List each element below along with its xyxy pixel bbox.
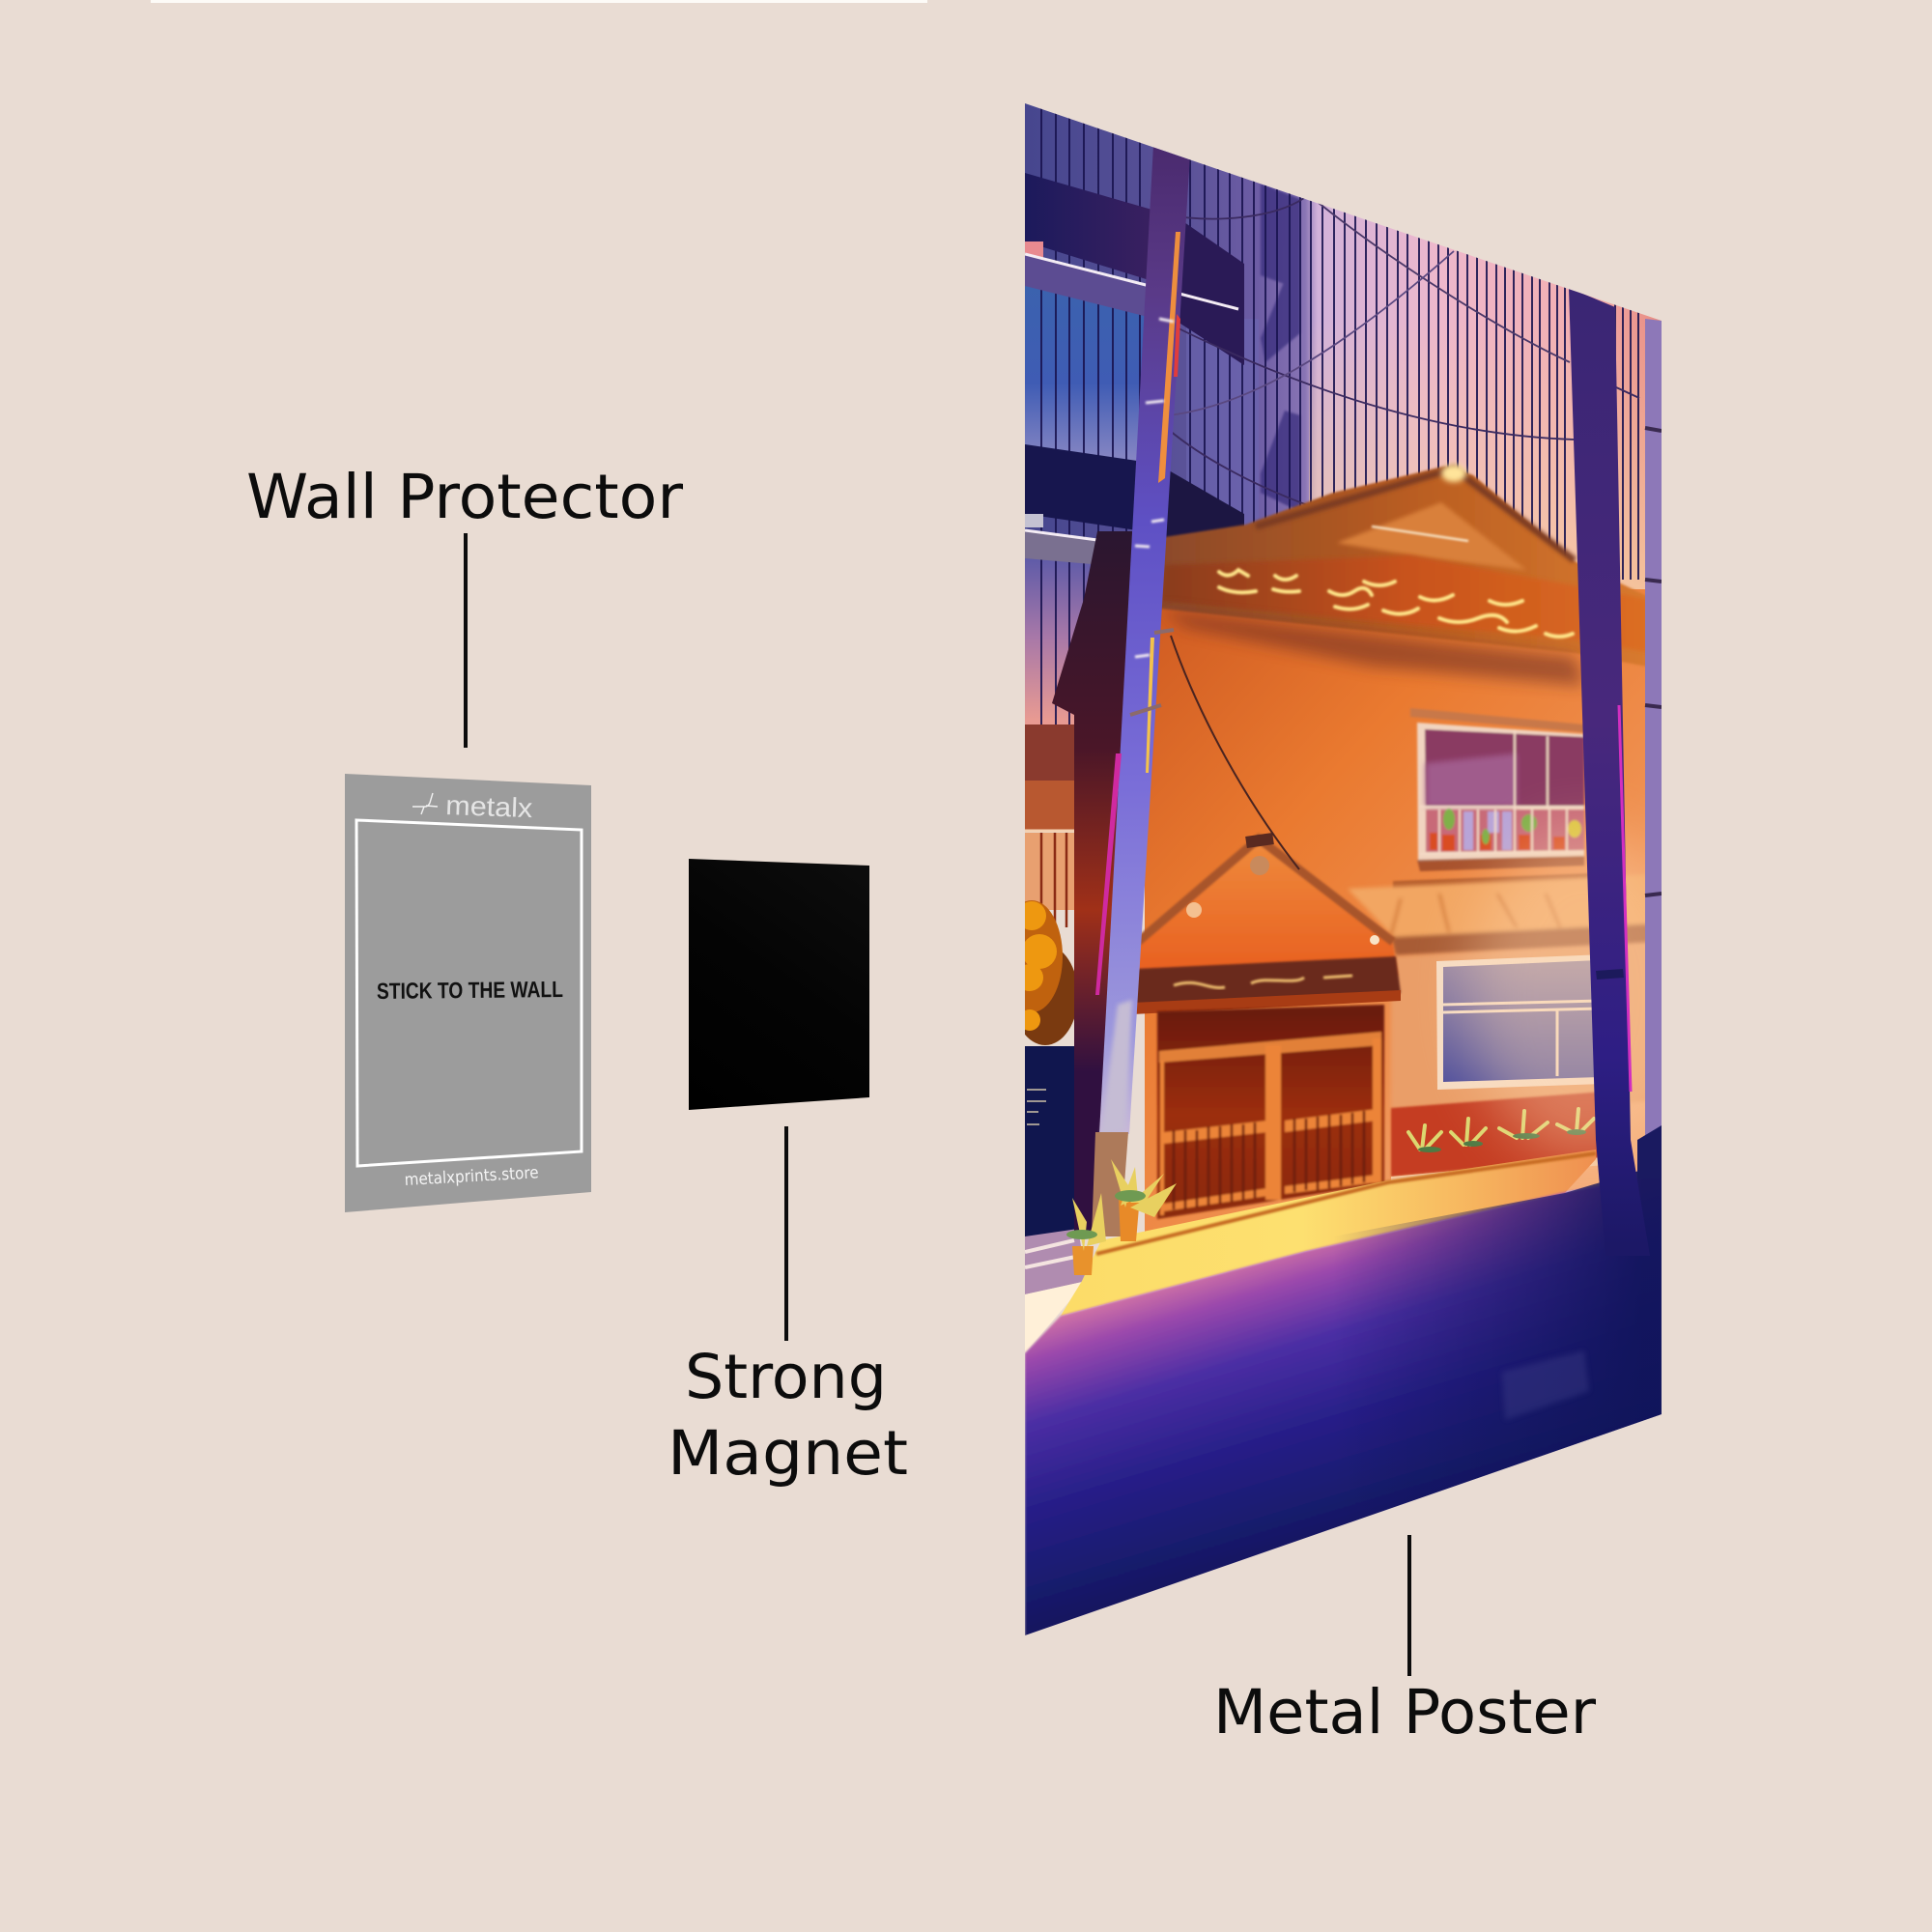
metal poster label: Metal Poster [1213,1677,1596,1747]
strong magnet label: Strong [685,1342,887,1412]
poster: upper window [1393,708,1594,891]
strong magnet label: Magnet [668,1418,908,1489]
poster: road [1025,1164,1662,1642]
poster: lower window [1391,942,1657,1111]
white frame [356,820,582,1166]
metal poster [1001,97,1700,1642]
wall protector plate [345,774,591,1212]
poster: dark building bands and rails [1025,173,1244,564]
poster: overhead wires [1173,198,1640,504]
poster: red planter wall [1391,1092,1604,1186]
strong magnet label [668,1342,908,1489]
logo mark [412,793,438,814]
poster: hanging wire [1171,636,1299,869]
poster: right pole [1569,288,1650,1256]
poster: main roof [1160,465,1647,686]
poster: sliding door [1157,1005,1384,1219]
poster: building shadow stripes [1261,184,1300,512]
poster: sky and facade [1025,97,1662,724]
logo wordmark: metalx [445,790,533,823]
poster: right drainpipe [1637,319,1662,1179]
strong magnet leader line [784,1126,788,1341]
poster: house wall [1145,589,1662,1246]
stick to the wall text: STICK TO THE WALL [377,977,563,1004]
poster: small gable [1132,833,1401,1014]
wall protector leader line [464,533,468,748]
strong magnet plate [689,859,869,1110]
poster: house glow [1468,831,1700,1159]
poster: lower right roof [1348,874,1657,956]
infographic canvas [151,0,1662,1734]
wall protector label: Wall Protector [246,462,683,532]
top white strip [151,0,927,3]
poster: utility pole [1092,145,1190,1236]
poster: orange foliage [1025,900,1074,1045]
poster: dark pier [1052,531,1132,1236]
metal poster leader line [1407,1535,1411,1676]
url text: metalxprints.store [404,1163,539,1190]
poster: potted plants [1066,1159,1177,1275]
poster: sidewalk [1061,1150,1596,1316]
poster: vertical slats [1041,97,1638,734]
poster: left lower facade [1025,724,1085,1352]
